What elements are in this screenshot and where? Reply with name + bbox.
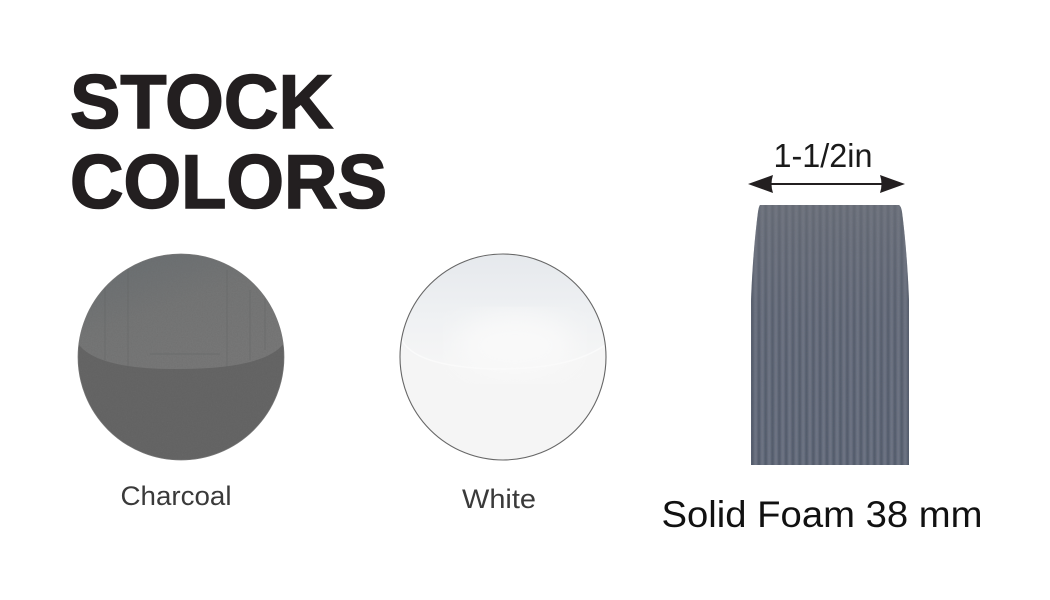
dimension label: 1-1/2in: [774, 137, 872, 174]
swatch: white: [398, 250, 608, 460]
stock colors infographic: [71, 74, 980, 528]
title: STOCK: [70, 60, 333, 145]
arrow: width dimension: [748, 175, 905, 193]
title: [70, 60, 387, 225]
foam strip sample: [751, 205, 909, 465]
label: White: White: [462, 484, 536, 514]
swatch: charcoal: [76, 250, 286, 460]
caption: foam: Solid Foam 38 mm: [662, 494, 982, 535]
label: Charcoal: Charcoal: [120, 481, 232, 511]
title: COLORS: [70, 140, 387, 225]
